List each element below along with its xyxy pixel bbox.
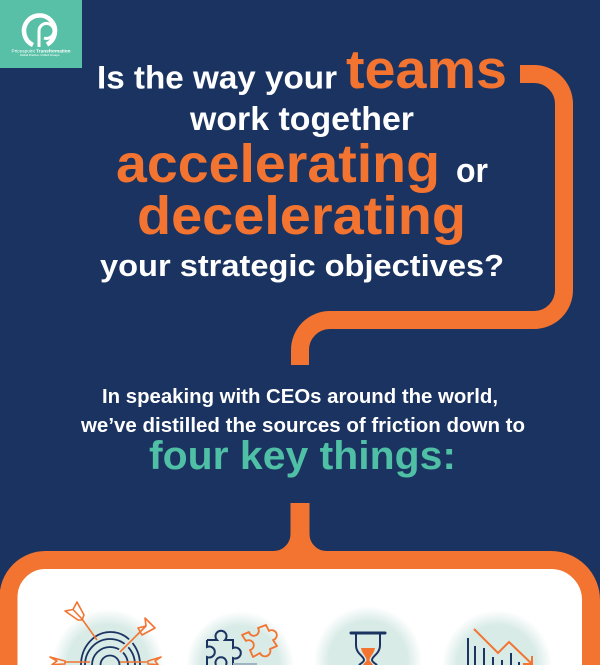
logo block (0, 0, 82, 68)
headline (97, 38, 507, 283)
target rings (81, 632, 140, 665)
sand (361, 648, 375, 665)
word: accelerating: accelerating (116, 134, 440, 194)
soft backdrop (314, 606, 422, 665)
logo name: Pricespoint Transformation (12, 48, 71, 54)
intro line 1: In speaking with CEOs around the world, (102, 386, 498, 408)
white panel (8, 560, 591, 665)
bars (468, 638, 519, 665)
logo tagline: Global Practice. Unified Groups. (20, 54, 60, 57)
arrows (50, 602, 161, 664)
soft backdrop (52, 609, 164, 665)
teal emphasis: four key things: (149, 434, 456, 478)
headline last line: your strategic objectives? (100, 248, 504, 283)
word: teams: teams (346, 38, 507, 100)
headline line 2: work together (189, 100, 414, 137)
icon: target with arrows (50, 602, 164, 665)
word: decelerating: decelerating (137, 186, 466, 246)
headline line 1: Is the way your (97, 60, 337, 96)
orange bracket (8, 503, 591, 665)
glass (356, 633, 380, 665)
arrow gap (120, 632, 140, 652)
word: or: or (456, 152, 488, 190)
third puzzle piece (233, 663, 257, 665)
intro text (80, 386, 525, 478)
top connector line (300, 74, 564, 365)
soft backdrop (442, 610, 552, 665)
orange puzzle piece (242, 625, 277, 657)
top bar (351, 632, 385, 634)
soft backdrop (186, 611, 294, 665)
icon: hourglass (314, 606, 422, 665)
icon: puzzle pieces (186, 611, 294, 665)
logo mark (24, 15, 55, 47)
blue puzzle piece (207, 631, 241, 665)
intro line 2: we’ve distilled the sources of friction down to (80, 415, 525, 437)
falling arrow (474, 629, 532, 664)
icon: declining chart (442, 610, 552, 665)
